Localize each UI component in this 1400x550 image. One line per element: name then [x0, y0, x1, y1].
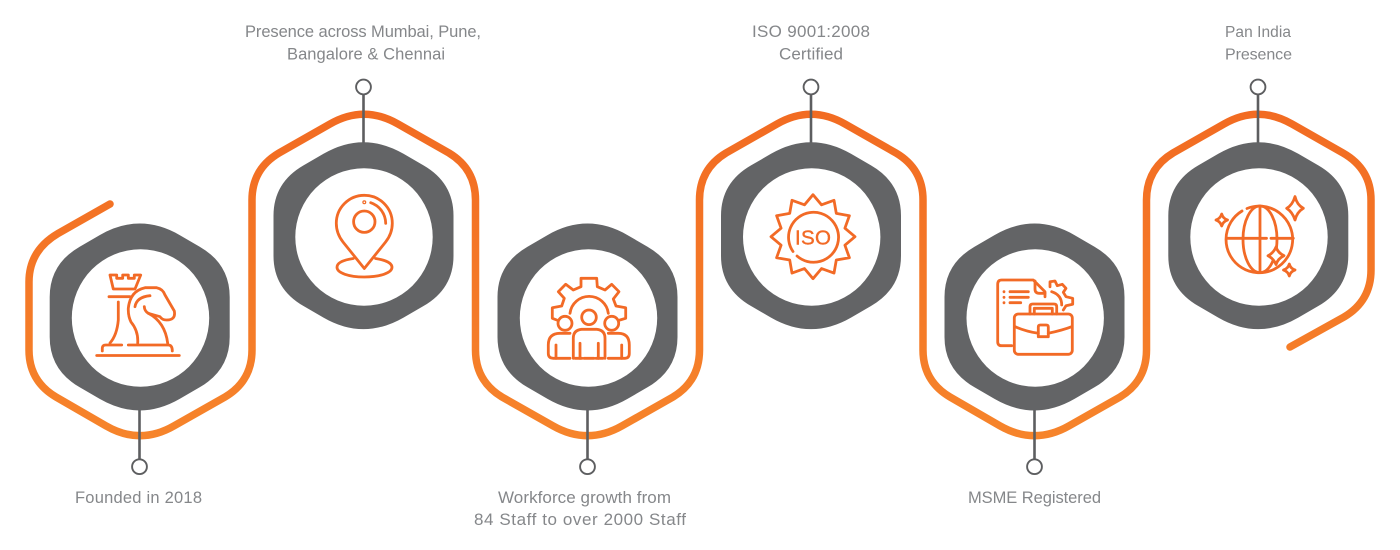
- label: presence across cities: Bangalore & Chennai: [287, 46, 445, 64]
- label: workforce growth: 84 Staff to over 2000 Staff: [474, 510, 686, 529]
- label: ISO certified: [752, 22, 870, 64]
- connector pin 6: [1251, 80, 1265, 152]
- milestone 1: founded: [50, 224, 230, 474]
- white circle 1: [72, 249, 209, 387]
- icon: team and gear: [548, 278, 629, 358]
- icon: ISO badge: ISO: [795, 226, 831, 250]
- white circle 6: [1190, 168, 1328, 306]
- label: founded: Founded in 2018: [75, 489, 202, 507]
- label: pan India presence: Presence: [1225, 46, 1292, 64]
- connector pin 4: [804, 80, 818, 150]
- milestone 4: ISO: [721, 80, 901, 329]
- connector pin 3: [580, 400, 595, 474]
- icon: map pin: [336, 195, 392, 277]
- connector pin 5: [1027, 400, 1042, 474]
- milestone 2: presence: [274, 80, 454, 329]
- label: presence across cities: Presence across Mumbai, Pune,: [245, 23, 481, 41]
- gray hexagon 3: [498, 224, 678, 410]
- gray hexagon 2: [274, 142, 454, 329]
- connector pin 2: [356, 80, 371, 150]
- milestone 3: workforce: [498, 224, 678, 474]
- icon: briefcase and document: [998, 280, 1073, 354]
- gray hexagon 4: [721, 142, 901, 329]
- label: pan India presence: Pan India: [1225, 24, 1291, 41]
- white circle 3: [520, 249, 657, 387]
- label: pan India presence: [1225, 24, 1292, 64]
- milestone 5: MSME: [944, 224, 1124, 474]
- icon: globe with sparkles: [1216, 197, 1303, 276]
- label: workforce growth: [474, 488, 686, 529]
- icon: ISO badge: [771, 195, 855, 279]
- milestone 6: pan India: [1168, 80, 1348, 329]
- gray hexagon 1: [50, 224, 230, 410]
- label: MSME registered: MSME Registered: [968, 489, 1101, 507]
- connector pin 1: [132, 400, 147, 474]
- white circle 4: [743, 168, 880, 306]
- white circle 2: [295, 168, 433, 306]
- label: presence across cities: [245, 23, 481, 64]
- white circle 5: [966, 249, 1104, 387]
- orange winding track: [29, 114, 1371, 436]
- label: ISO certified: Certified: [779, 44, 843, 64]
- label: workforce growth: Workforce growth from: [498, 488, 671, 507]
- gray hexagon 5: [944, 224, 1124, 410]
- gray hexagon 6: [1168, 142, 1348, 329]
- icon: chess rook and knight: [97, 275, 179, 356]
- label: ISO certified: ISO 9001:2008: [752, 22, 870, 41]
